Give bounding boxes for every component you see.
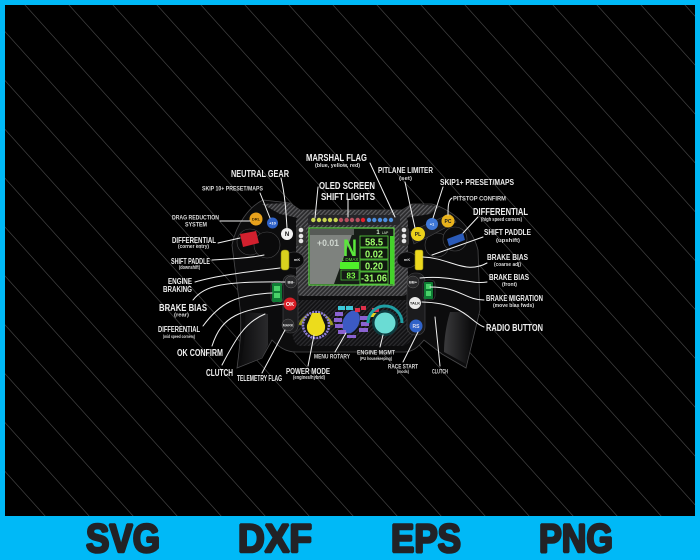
top left buttons: +10 [269,220,277,226]
left lower buttons: OK [286,302,294,308]
OLED screen: 83 [347,272,356,280]
labels left: ENGINE [168,277,193,286]
OLED screen: 1 [376,230,380,236]
labels top and bottom centre: CLUTCH [432,370,448,376]
engine mgmt dial [368,306,402,336]
labels left: BRAKE BIAS [159,303,207,314]
labels left: (rear) [174,312,189,318]
labels left: CLUTCH [206,368,233,379]
carbon top bar [262,203,440,226]
labels top and bottom centre: (engines/hybrid) [293,375,325,381]
labels top and bottom centre: OLED SCREEN [319,181,375,192]
labels left: DIFFERENTIAL [172,236,216,245]
labels right: BRAKE BIAS [487,253,529,262]
labels right: DIFFERENTIAL [473,207,528,218]
yellow rotary right: mK [404,257,410,262]
format labels: PNG [539,517,613,560]
top left buttons: DRL [252,216,261,222]
labels top and bottom centre: (PU housekeeping) [360,356,392,361]
right lower buttons: RS [413,324,420,330]
left lower buttons [272,276,297,331]
format labels: EPS [391,517,461,560]
labels top and bottom centre: MENU ROTARY [314,354,350,360]
lower dial panel [292,300,415,346]
labels left: DIFFERENTIAL [158,325,200,334]
labels left: OK CONFIRM [177,348,223,359]
OLED screen: 0.20 [365,262,383,272]
top left buttons [240,212,293,247]
top right buttons [411,214,465,246]
carbon center plate [296,216,408,296]
power mode dial [300,312,332,338]
labels left: (downshift) [179,265,200,271]
leader lines [193,163,487,373]
OLED screen: -31.06 [361,274,387,284]
yellow rotary left [281,250,300,270]
labels left: NEUTRAL GEAR [231,169,290,180]
labels right: RADIO BUTTON [486,323,543,334]
labels left: BRAKING [163,285,192,294]
labels left: (mid speed corners) [163,334,195,339]
format labels: SVG [86,517,160,560]
labels right: PITLANE LIMITER [378,166,433,175]
wheel body [232,200,480,368]
labels right: BRAKE BIAS [489,273,530,282]
labels right: (front) [502,282,517,288]
menu rotary dial [334,306,379,338]
labels left: TELEMETRY FLAG [237,374,282,383]
format labels [86,517,613,560]
labels right: (set) [399,176,412,182]
OLED screen: LAP [382,231,389,235]
labels left: SHIFT PADDLE [171,257,210,266]
yellow rotary right [404,250,423,270]
steering wheel [232,200,480,368]
labels left: SYSTEM [185,222,207,228]
OLED screen: 0.02 [365,250,383,260]
shift lights [308,215,400,225]
labels right: (coarse adj) [494,262,521,268]
labels top and bottom centre: POWER MODE [286,367,331,376]
left lower buttons: BB- [287,280,295,284]
labels right: (move bias fwds) [493,303,534,309]
right lower buttons: TALK [410,300,420,306]
format labels: DXF [238,517,312,560]
labels right: SHIFT PADDLE [484,228,532,237]
OLED screen: N [343,235,357,262]
labels left: (corner entry) [178,244,209,250]
labels right [378,166,543,334]
OLED screen: 58.5 [365,238,383,248]
labels right: PITSTOP CONFIRM [453,196,506,202]
left side pods [237,229,304,333]
labels top and bottom centre: ENGINE MGMT [357,350,395,356]
right lower buttons [407,276,433,332]
labels top and bottom centre: (blue, yellow, red) [315,163,360,169]
top right buttons: +1 [430,222,435,226]
left grip [240,312,268,366]
right lower buttons: BB+ [409,280,418,284]
yellow rotary left: mK [294,257,300,262]
right grip [444,312,471,364]
left lower buttons: MARK [283,324,294,328]
labels right: SKIP1+ PRESET/MAPS [440,178,515,187]
OLED screen: 1 DMAX [342,257,358,262]
labels top and bottom centre: (mods) [397,369,409,374]
labels left: DRAG REDUCTION [172,214,219,222]
labels top and bottom centre [286,153,448,381]
labels left [158,169,290,383]
side indicator lights [296,227,409,246]
OLED screen [309,228,394,285]
labels left: SKIP 10+ PRESET/MAPS [202,186,264,192]
top right buttons: PC [445,219,452,225]
top right buttons: PL [415,232,421,238]
right side pods [397,214,467,335]
labels top and bottom centre: RACE START [388,364,418,370]
labels right: (high speed corners) [481,217,522,223]
top left buttons: N [285,232,289,238]
labels right: BRAKE MIGRATION [486,294,543,303]
labels top and bottom centre: MARSHAL FLAG [306,153,367,164]
OLED screen: +0.01 [317,238,339,248]
labels right: (upshift) [496,238,520,244]
labels top and bottom centre: SHIFT LIGHTS [321,192,375,203]
